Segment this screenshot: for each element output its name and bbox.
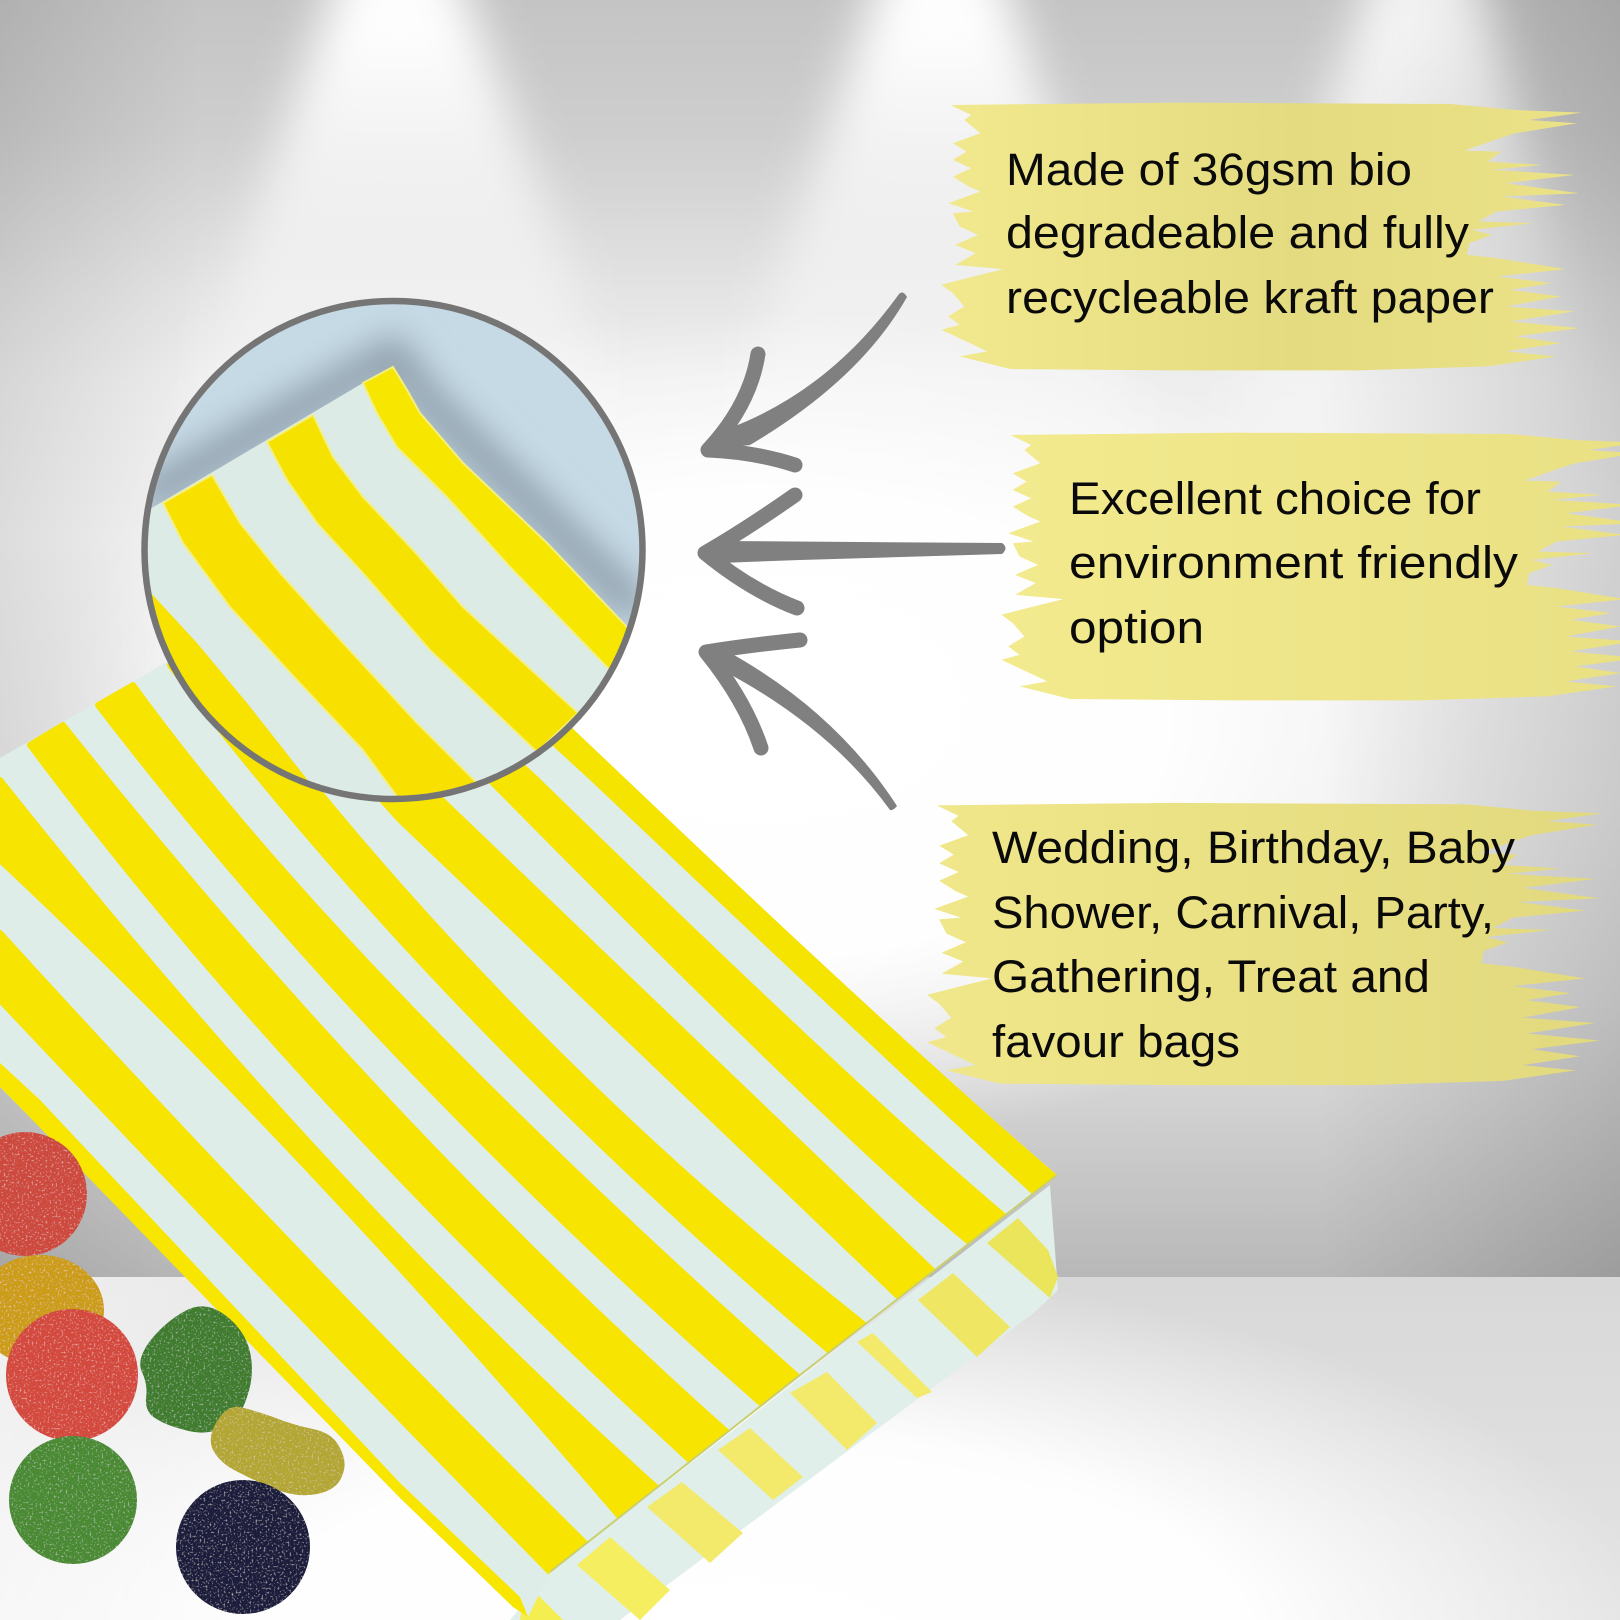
candy: navy: [176, 1480, 310, 1614]
material text: recycleable kraft paper: [1006, 272, 1494, 323]
arrow: bottom, pointing to the circle: [706, 640, 897, 810]
panel: eco friendly: [1001, 433, 1620, 700]
eco text: Excellent choice for: [1069, 473, 1481, 524]
product: striped paper bag: [0, 662, 1058, 1620]
brush stroke background: [927, 803, 1602, 1085]
eco text: [1069, 473, 1519, 653]
eco text: option: [1069, 602, 1204, 653]
panel: occasions: [927, 803, 1602, 1085]
occasions text: Gathering, Treat and: [992, 951, 1430, 1002]
magnifier ring: [144, 301, 642, 799]
material text: degradeable and fully: [1006, 207, 1470, 258]
candy: red top: [0, 1132, 87, 1256]
material text: Made of 36gsm bio: [1006, 144, 1412, 195]
arrow: middle, pointing to the circle: [703, 495, 1006, 608]
brush stroke background: [1001, 433, 1620, 700]
occasions text: [992, 822, 1516, 1067]
bag gusset panel: [510, 1185, 1058, 1620]
occasions text: favour bags: [992, 1016, 1240, 1067]
eco text: environment friendly: [1069, 537, 1519, 588]
material text: [1006, 144, 1494, 323]
occasions text: Shower, Carnival, Party,: [992, 887, 1494, 938]
sugar-coated jelly candies: [0, 1132, 345, 1614]
occasions text: Wedding, Birthday, Baby: [992, 822, 1516, 873]
candy: yellow-olive: [211, 1407, 345, 1495]
magnified view: [148, 304, 640, 796]
magnifier circle: bag corner detail: [141, 298, 646, 802]
bag front panel: [0, 662, 1058, 1617]
candy: orange: [0, 1255, 104, 1365]
brush stroke background: [941, 103, 1582, 370]
arrow: top, pointing to the circle: [708, 293, 907, 465]
panel: material: [941, 103, 1582, 370]
candy: green: [9, 1436, 137, 1564]
candy: red middle: [6, 1309, 138, 1441]
candy: dark green: [140, 1306, 252, 1433]
